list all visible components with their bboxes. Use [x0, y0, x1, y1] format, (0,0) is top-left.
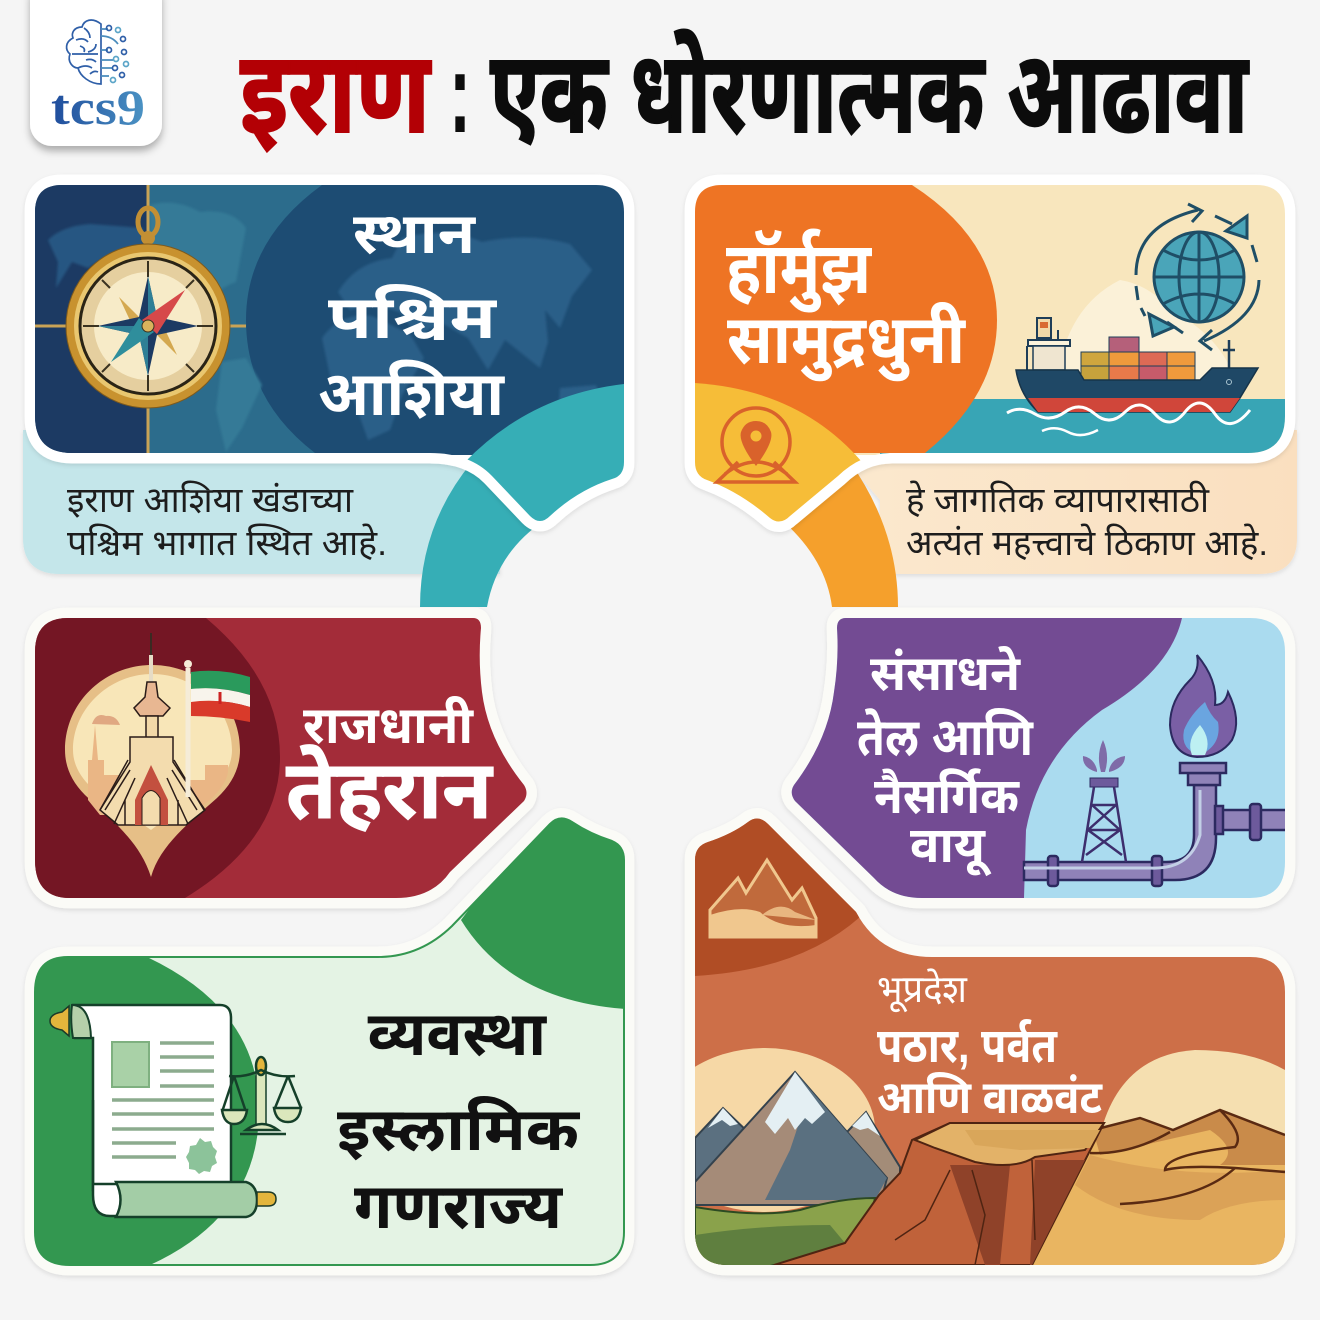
waves	[1007, 403, 1250, 424]
heading: location	[318, 202, 506, 429]
panel: Strait of Hormuz (top right)	[695, 185, 1297, 607]
connector arc: orange	[784, 462, 898, 607]
teal corner	[468, 384, 624, 521]
heading: Strait of Hormuz: सामुद्रधुनी	[727, 302, 967, 381]
heading: terrain: आणि वाळवंट	[877, 1071, 1103, 1123]
heading: system: गणराज्य	[354, 1172, 563, 1242]
heading: terrain	[877, 967, 1103, 1123]
compass crosshair	[35, 185, 246, 453]
orange circle	[695, 185, 997, 453]
world map silhouettes	[48, 203, 606, 452]
flag	[186, 668, 190, 797]
icon: circuit brain	[67, 20, 128, 84]
logo wordmark: tcs9	[51, 79, 145, 135]
tower	[150, 633, 152, 672]
icon: globe with arrows	[1136, 204, 1259, 350]
heading: terrain: भूप्रदेश	[877, 967, 968, 1013]
heading: system: इस्लामिक	[337, 1096, 580, 1163]
description text: पश्चिम भागात स्थित आहे.	[67, 523, 387, 563]
description text: इराण आशिया खंडाच्या	[67, 480, 354, 520]
icon: mountains and dunes	[710, 860, 816, 937]
illustration: plateau cliff	[774, 1123, 1104, 1265]
heading: resources: तेल आणि	[857, 708, 1034, 767]
connector arc: teal	[420, 462, 545, 607]
dark corner	[695, 810, 860, 976]
icon: gas flame	[1170, 655, 1236, 757]
icon: container ship	[1007, 318, 1258, 435]
heading: capital Tehran: तेहरान	[286, 744, 494, 836]
heading: Strait of Hormuz: हॉर्मुझ	[726, 228, 872, 313]
sun discs	[695, 1048, 875, 1212]
heading: resources: वायू	[910, 817, 992, 877]
panel: location (top left)	[23, 185, 625, 607]
illustration: desert	[1033, 1130, 1285, 1265]
heading: system	[337, 1000, 580, 1242]
panel: capital (middle left)	[35, 618, 535, 898]
icon: pipeline	[1024, 763, 1290, 886]
heading: location: पश्चिम	[328, 284, 497, 351]
illustration: mountains	[695, 1072, 900, 1210]
panel: terrain (bottom right)	[655, 810, 1290, 1270]
sea	[880, 399, 1290, 459]
heading: capital Tehran	[286, 697, 494, 836]
description text: अत्यंत महत्त्वाचे ठिकाण आहे.	[906, 523, 1268, 563]
heading: resources: नैसर्गिक	[874, 768, 1020, 824]
description backing panel	[23, 430, 500, 574]
heading: resources	[857, 645, 1034, 877]
heading: capital Tehran: राजधानी	[303, 697, 475, 755]
heading: location: आशिया	[318, 359, 506, 429]
icon: constitution scroll	[50, 1005, 276, 1217]
icon: map pin	[717, 408, 795, 482]
yellow corner	[695, 383, 860, 522]
panel: system of government (bottom left)	[35, 815, 625, 1265]
heading: resources: संसाधने	[870, 645, 1021, 701]
description backing panel	[820, 430, 1297, 574]
description text	[906, 480, 1268, 563]
description text	[67, 480, 387, 563]
icon: compass	[66, 208, 230, 408]
lighter map band	[148, 185, 322, 453]
heading: terrain: पठार, पर्वत	[877, 1018, 1058, 1073]
icon: oil derrick	[1082, 740, 1126, 862]
panel: resources (middle right)	[785, 618, 1290, 898]
description text: हे जागतिक व्यापारासाठी	[906, 480, 1210, 520]
icon: scales of justice	[222, 1057, 301, 1134]
heading: system: व्यवस्था	[367, 1000, 548, 1069]
cloud	[1066, 280, 1228, 380]
title: इराण	[240, 30, 432, 157]
heading: location: स्थान	[353, 202, 476, 266]
heading: Strait of Hormuz	[726, 228, 967, 381]
title: :	[449, 30, 471, 157]
logo: tcs9	[30, 0, 162, 146]
icon: Tehran pin	[65, 633, 250, 877]
